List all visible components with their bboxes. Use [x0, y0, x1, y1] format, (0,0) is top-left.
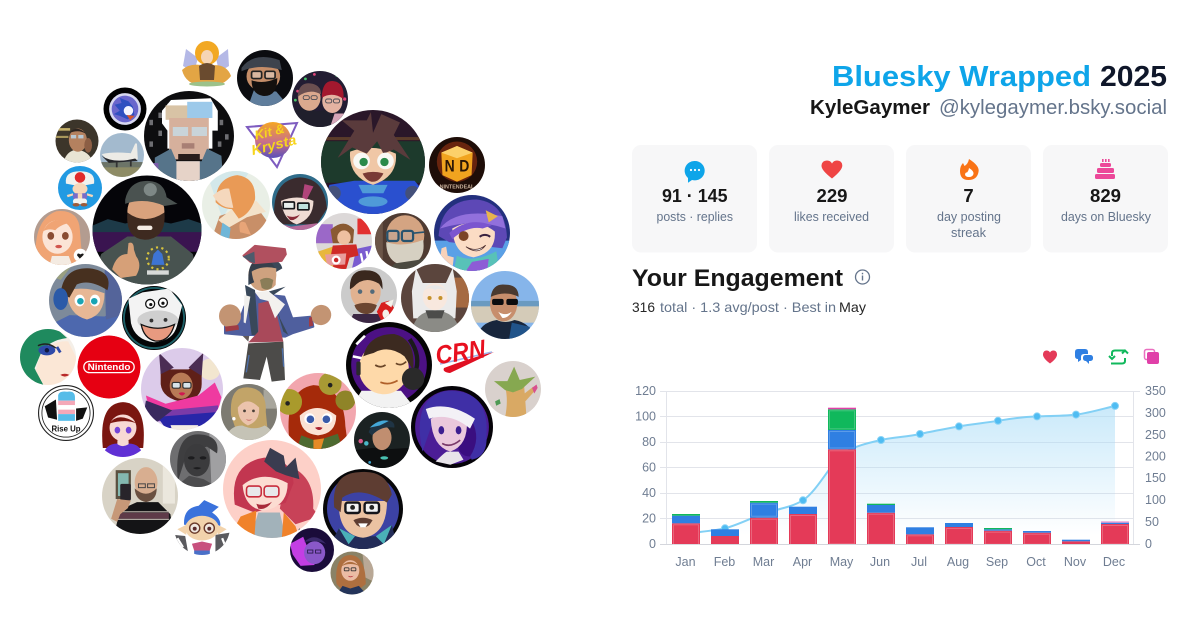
right axis labels: 0 [1145, 537, 1152, 551]
right axis labels: 250 [1145, 428, 1166, 442]
legend icons [1043, 349, 1159, 364]
avatar: mandrake plant [485, 361, 541, 417]
panel: day posting streak stat [906, 145, 1031, 252]
avatar: woman with glasses [330, 552, 374, 594]
month labels: Jan [675, 555, 696, 569]
right axis labels: 200 [1145, 450, 1166, 464]
avatar: man with sunglasses at the beach [471, 271, 539, 339]
month labels: Aug [947, 555, 969, 569]
avatar: character with glasses and pink streak [272, 174, 328, 230]
panel: likes received stat [769, 145, 894, 252]
icon: flame [960, 159, 979, 180]
panel: posts and replies stat: 91 · 145 [662, 185, 728, 206]
avatar: Nintendo: Nintendo [88, 362, 131, 372]
avatar: man with blue-lit cap [354, 412, 410, 468]
avatar: cartoon hippo [122, 286, 186, 350]
central trainer character [219, 246, 335, 382]
panel: day posting streak stat: streak [951, 226, 987, 240]
avatar: Kit & Krysta logo: Krysta [249, 131, 298, 158]
title: 2025 [1100, 61, 1167, 93]
panel: day posting streak stat: day posting [937, 210, 1001, 224]
month labels: Jul [911, 555, 927, 569]
cumulative line [686, 406, 1115, 534]
avatar: orange-haired anime girl [34, 209, 90, 265]
avatar: fairy [182, 41, 231, 86]
month labels: Mar [753, 555, 774, 569]
icon: birthday cake [1095, 159, 1115, 179]
bars: reposts [672, 409, 1012, 529]
avatar: green-haired anime [20, 329, 76, 385]
avatar: purple curly hair with headband [411, 386, 493, 468]
avatar: Splatoon inkling [174, 499, 230, 555]
month labels: Dec [1103, 555, 1125, 569]
left axis labels: 120 [635, 384, 656, 398]
avatar: pixel-art man [144, 91, 234, 181]
month labels: Sep [986, 555, 1008, 569]
avatar: toad [58, 166, 102, 210]
right axis labels: 150 [1145, 471, 1166, 485]
avatar: boy with blue headphones [49, 264, 122, 337]
icon: reposts legend arrows [1109, 350, 1128, 364]
left axis labels: 80 [642, 435, 656, 449]
panel: days on Bluesky stat [1043, 145, 1168, 252]
avatar: sonic [104, 88, 146, 130]
panel: likes received stat: likes received [794, 210, 869, 224]
left axis labels: 100 [635, 410, 656, 424]
avatar: purple-lit portrait [290, 528, 334, 572]
heading: your engagement: Your Engagement [632, 265, 843, 292]
avatar: large bearded man thumbs up [92, 176, 202, 284]
icon: heart [821, 160, 842, 178]
month labels: May [830, 555, 854, 569]
user name and handle: KyleGaymer [810, 97, 930, 119]
bars: replies [672, 430, 1129, 541]
avatar: Mega Man hero [321, 110, 425, 214]
panel: posts and replies stat: posts · replies [656, 210, 733, 224]
icon: replies legend bubbles [1075, 349, 1093, 364]
avatar: Kit & Krysta logo [246, 119, 298, 167]
avatar: bald man mirror selfie [102, 458, 178, 534]
avatar: white-haired catgirl [401, 264, 469, 332]
avatar: space shuttle [100, 133, 144, 177]
title: Bluesky Wrapped [832, 61, 1091, 93]
month labels: Feb [714, 555, 735, 569]
avatar: cartoon man with glasses [323, 469, 403, 549]
avatar: CRN logo: CRN [434, 333, 488, 370]
avatar: man on phone [56, 120, 98, 162]
avatar: black and white portrait [170, 431, 226, 487]
avatar: Rise Up trans flag fist: Rise Up [51, 423, 81, 433]
bars: likes [672, 449, 1129, 544]
engagement summary: total · 1.3 avg/post · Best in [660, 299, 836, 315]
avatar: catgirl with bi pride flag [141, 348, 223, 430]
right axis labels [1145, 384, 1166, 551]
avatar: red-haired bell girl [276, 372, 356, 449]
avatar cluster [20, 41, 541, 594]
avatar: bearded man with cap [237, 50, 293, 106]
panel: days on Bluesky stat: days on Bluesky [1061, 210, 1152, 224]
avatar: purple-shirt girl [102, 402, 144, 457]
icon: info [856, 270, 870, 284]
avatar: bald man with blue glasses [375, 213, 431, 269]
chart: monthly engagement stacked bars with cumulative line [635, 384, 1166, 569]
avatar: ND Nintendeal cube: NINTENDEAL [440, 185, 474, 191]
icon: speech bubble [685, 161, 705, 183]
engagement summary: May [839, 299, 866, 315]
avatar: headphones character [346, 322, 432, 408]
bars: quotes [828, 408, 1129, 523]
month labels: Jun [870, 555, 890, 569]
avatar: man with red plush [341, 267, 397, 323]
avatar: Nintendo [78, 336, 140, 398]
bar highlight borders [674, 411, 1128, 545]
avatar: ND Nintendeal cube: D [459, 157, 469, 176]
left axis labels: 60 [642, 460, 656, 474]
user name and handle [810, 97, 1167, 119]
left axis labels: 20 [642, 512, 656, 526]
avatar: blonde woman [221, 384, 277, 440]
month labels: Nov [1064, 555, 1087, 569]
cumulative points [722, 402, 1118, 532]
avatar: Kit & Krysta logo: Kit & [253, 121, 286, 143]
grid lines [660, 391, 1140, 544]
month labels: Apr [793, 555, 812, 569]
avatar: ND Nintendeal cube: N [445, 157, 455, 176]
panel: days on Bluesky stat: 829 [1090, 185, 1121, 206]
engagement summary: 316 [632, 299, 655, 315]
left axis labels: 40 [642, 486, 656, 500]
month labels: Oct [1026, 555, 1046, 569]
user name and handle: @kylegaymer.bsky.social [939, 97, 1167, 119]
icon: likes legend heart [1043, 350, 1057, 364]
avatar: purple-capped wink character [434, 195, 510, 271]
panel: day posting streak stat: 7 [963, 185, 974, 206]
avatar: red-haired girl with bow [223, 440, 321, 538]
avatar: colorful collage [316, 213, 372, 269]
right axis labels: 50 [1145, 515, 1159, 529]
avatar: orange-haired sketch [202, 171, 270, 239]
month labels [675, 555, 1125, 569]
panel: likes received stat: 229 [816, 185, 848, 206]
left axis labels [635, 384, 656, 551]
right axis labels: 300 [1145, 406, 1166, 420]
right axis labels: 350 [1145, 384, 1166, 398]
avatar: Rise Up trans flag fist [39, 386, 93, 440]
panel: posts and replies stat [632, 145, 757, 252]
avatar: ND Nintendeal cube [429, 137, 485, 193]
left axis labels: 0 [649, 537, 656, 551]
avatar: couple selfie [292, 71, 348, 127]
cumulative area [686, 406, 1115, 544]
icon: quotes legend squares [1144, 350, 1159, 364]
right axis labels: 100 [1145, 493, 1166, 507]
